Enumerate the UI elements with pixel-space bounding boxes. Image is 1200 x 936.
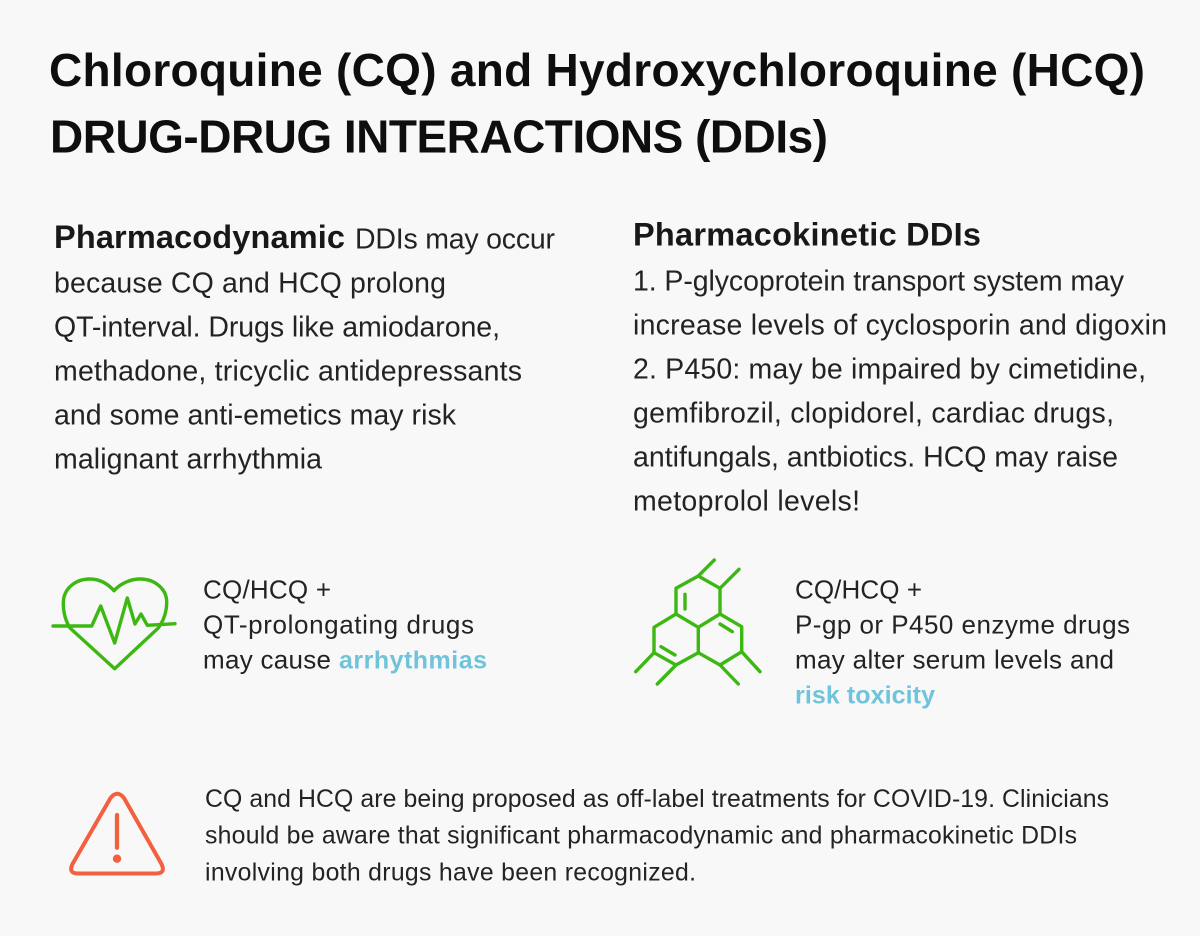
text block: pharmacodynamic DDIs (54, 219, 556, 476)
icon: molecule (636, 560, 760, 684)
text block: arrhythmia risk: QT-prolongating drugs (203, 610, 474, 640)
text block: toxicity risk: may alter serum levels and (795, 644, 1114, 674)
text block: arrhythmia risk: arrhythmias (339, 646, 487, 674)
text block: toxicity risk (795, 574, 1130, 710)
text block: pharmacokinetic DDIs: antifungals, antbiotics. HCQ may raise (633, 442, 1118, 474)
text block: pharmacokinetic DDIs: increase levels of cyclosporin and digoxin (633, 310, 1167, 342)
icon: heart with ECG trace (53, 579, 175, 669)
text block: clinician warning: should be aware that significant pharmacodynamic and pharmacokinetic DDIs (205, 822, 1077, 850)
title: Chloroquine (CQ) and Hydroxychloroquine (HCQ) (49, 44, 1145, 96)
text block: pharmacodynamic DDIs: QT-interval. Drugs like amiodarone, (54, 312, 500, 344)
text block: clinician warning: involving both drugs have been recognized. (205, 860, 696, 886)
text block: pharmacodynamic DDIs: Pharmacodynamic (54, 219, 345, 255)
text block: toxicity risk: CQ/HCQ + (795, 574, 922, 604)
title (49, 44, 1145, 162)
text block: toxicity risk: risk toxicity (795, 682, 935, 710)
text block: pharmacodynamic DDIs: DDIs may occur (355, 224, 556, 256)
text block: pharmacokinetic DDIs: Pharmacokinetic DDIs (633, 216, 981, 252)
text block: clinician warning (205, 786, 1109, 886)
text block: arrhythmia risk: may cause (203, 644, 331, 674)
text block: arrhythmia risk: CQ/HCQ + (203, 574, 331, 604)
text block: pharmacokinetic DDIs (633, 216, 1167, 518)
text block: clinician warning: CQ and HCQ are being proposed as off-label treatments for COVID-19. Clinicians (205, 786, 1109, 813)
text block: pharmacodynamic DDIs: because CQ and HCQ prolong (54, 268, 446, 300)
text block: pharmacokinetic DDIs: gemfibrozil, clopidorel, cardiac drugs, (633, 398, 1114, 430)
text block: pharmacokinetic DDIs: metoprolol levels! (633, 486, 860, 518)
text block: toxicity risk: P-gp or P450 enzyme drugs (795, 610, 1130, 640)
text block: arrhythmia risk (203, 574, 487, 674)
text block: pharmacodynamic DDIs: and some anti-emetics may risk (54, 400, 457, 432)
text block: pharmacodynamic DDIs: malignant arrhythmia (54, 444, 322, 476)
text block: pharmacodynamic DDIs: methadone, tricyclic antidepressants (54, 356, 522, 388)
icon: warning triangle (71, 794, 163, 874)
title: DRUG-DRUG INTERACTIONS (DDIs) (50, 110, 828, 162)
text block: pharmacokinetic DDIs: 1. P-glycoprotein transport system may (633, 266, 1125, 298)
text block: pharmacokinetic DDIs: 2. P450: may be impaired by cimetidine, (633, 354, 1146, 386)
